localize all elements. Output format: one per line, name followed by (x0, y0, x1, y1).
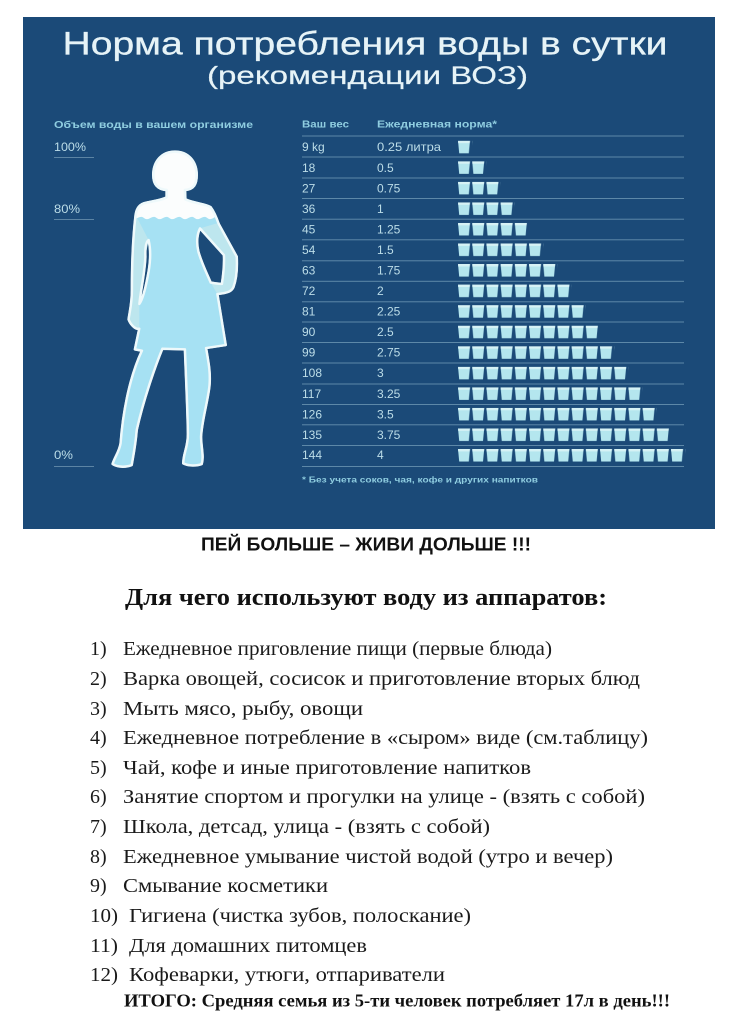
table: daily norm litres: 1.75 (377, 264, 401, 278)
table: daily norm litres: 1.5 (377, 243, 394, 257)
cups chart (458, 141, 685, 462)
numbered list: 11) (90, 935, 118, 957)
table: daily norm litres: 2.5 (377, 325, 394, 339)
silhouette: woman filled with water (113, 152, 237, 467)
table: daily norm litres: 1 (377, 202, 384, 216)
table: daily norm litres: 3.75 (377, 428, 401, 442)
numbered list: 10) (90, 905, 118, 927)
table: weights: 99 (302, 346, 316, 360)
table headers (302, 118, 498, 130)
numbered list: Мыть мясо, рыбу, овощи (123, 698, 363, 720)
total note: ИТОГО: Средняя семья из 5-ти человек потребляет 17л в день!!! (124, 990, 670, 1010)
numbered list: Ежедневное потребление в «сыром» виде (см.таблицу) (123, 727, 648, 749)
numbered list: 6) (90, 786, 107, 808)
numbered list: 7) (90, 816, 107, 838)
table: daily norm litres: 0.5 (377, 161, 394, 175)
table: daily norm litres: 1.25 (377, 222, 401, 236)
table: daily norm litres: 2 (377, 284, 384, 298)
table: weights: 18 (302, 161, 316, 175)
numbered list (90, 638, 648, 986)
numbered list: Ежедневное приговление пищи (первые блюда) (123, 638, 552, 660)
table headers: Ежедневная норма* (377, 118, 498, 130)
scale label: 100% (54, 142, 94, 158)
scale label: 0% (54, 450, 94, 467)
table: weights (302, 140, 325, 462)
numbered list: 5) (90, 757, 107, 779)
numbered list: 1) (90, 638, 107, 660)
scale label: 80%: 80% (54, 204, 80, 216)
numbered list: 3) (90, 698, 107, 720)
table: weights: 72 (302, 284, 316, 298)
subtitle: (рекомендации ВОЗ) (207, 62, 528, 90)
table: daily norm litres (377, 140, 441, 462)
table: daily norm litres: 4 (377, 448, 384, 462)
section heading: Для чего используют воду из аппаратов: (125, 584, 607, 611)
numbered list: Смывание косметики (123, 875, 328, 897)
numbered list: 9) (90, 875, 107, 897)
scale label: 100%: 100% (54, 142, 86, 154)
table: daily norm litres: 3.5 (377, 408, 394, 422)
numbered list: Занятие спортом и прогулки на улице - (взять с собой) (123, 786, 645, 808)
scale label: 0%: 0% (54, 450, 73, 462)
footnote: * Без учета соков, чая, кофе и других напитков (302, 474, 538, 484)
numbered list: Школа, детсад, улица - (взять с собой) (123, 816, 490, 838)
slogan: ПЕЙ БОЛЬШЕ – ЖИВИ ДОЛЬШЕ !!! (201, 534, 531, 554)
scale label: 80% (54, 204, 94, 220)
table row lines (302, 136, 684, 467)
left column heading: Объем воды в вашем организме (54, 119, 253, 131)
table: daily norm litres: 3 (377, 366, 384, 380)
numbered list: Варка овощей, сосисок и приготовление вторых блюд (123, 668, 640, 690)
table: weights: 108 (302, 366, 322, 380)
table: weights: 117 (302, 387, 321, 401)
table: daily norm litres: 0.25 литра (377, 140, 441, 154)
panel: water norm infographic (23, 17, 715, 529)
numbered list: 4) (90, 727, 107, 749)
table: weights: 63 (302, 264, 316, 278)
table: daily norm litres: 0.75 (377, 182, 401, 196)
numbered list: 2) (90, 668, 107, 690)
table: weights: 126 (302, 408, 322, 422)
numbered list: Для домашних питомцев (129, 935, 367, 957)
numbered list: Гигиена (чистка зубов, полоскание) (129, 905, 471, 927)
table: weights: 36 (302, 202, 316, 216)
table: weights: 9 kg (302, 140, 325, 154)
table: weights: 27 (302, 182, 316, 196)
numbered list: 8) (90, 846, 107, 868)
table: daily norm litres: 3.25 (377, 387, 401, 401)
table: weights: 81 (302, 304, 316, 318)
title: Норма потребления воды в сутки (62, 26, 668, 62)
numbered list: Кофеварки, утюги, отпариватели (129, 964, 445, 986)
table: weights: 54 (302, 243, 316, 257)
table: daily norm litres: 2.75 (377, 346, 401, 360)
table: weights: 135 (302, 428, 322, 442)
table: weights: 144 (302, 448, 322, 462)
table: daily norm litres: 2.25 (377, 304, 401, 318)
table: weights: 90 (302, 325, 316, 339)
numbered list: Чай, кофе и иные приготовление напитков (123, 757, 531, 779)
table headers: Ваш вес (302, 118, 349, 130)
numbered list: 12) (90, 964, 118, 986)
numbered list: Ежедневное умывание чистой водой (утро и вечер) (123, 846, 613, 868)
table: weights: 45 (302, 222, 316, 236)
